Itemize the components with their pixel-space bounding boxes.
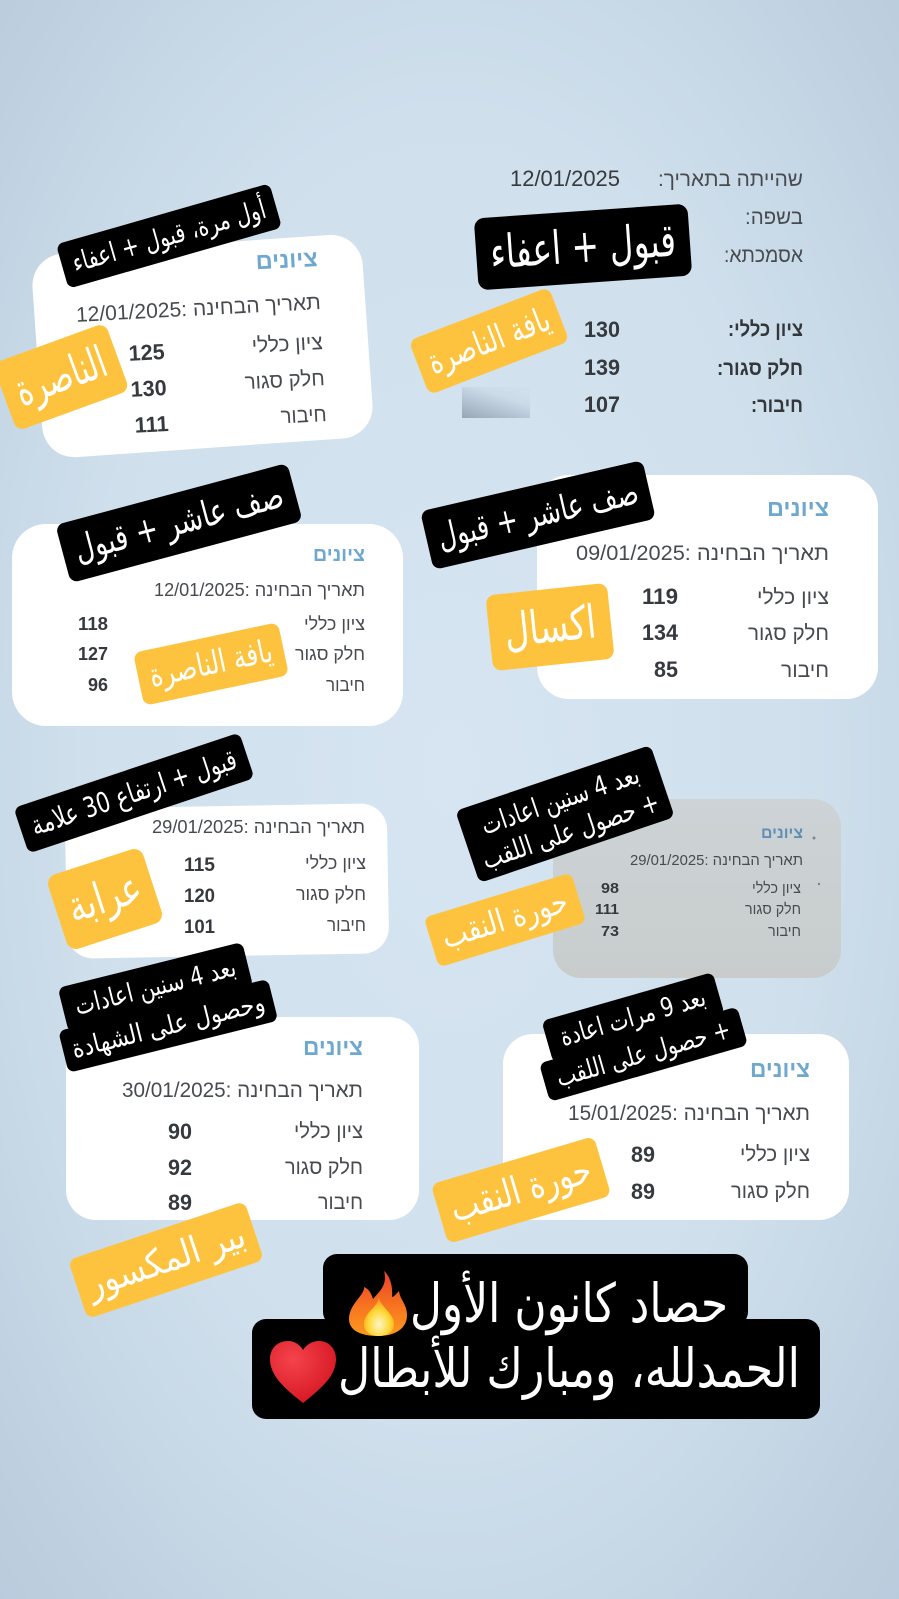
label: acceptance and 30 point rise: قبول + ارتفاع 30 علامة <box>27 743 241 842</box>
panel: card Iksal: 119 <box>642 584 678 609</box>
icon: fire <box>349 1271 407 1336</box>
label: four years of retakes and the degree: + حصول على اللقب <box>478 787 664 876</box>
label: four years of retakes and the certificate: بعد 4 سنين اعادات <box>72 953 239 1022</box>
panel: card Arraba <box>65 803 389 959</box>
panel: card Iksal: חיבור <box>781 659 829 682</box>
panel: card Arraba: ציון כללי <box>305 853 366 873</box>
label: four years of retakes and the certificate <box>48 938 278 1073</box>
panel: card Nazareth: חלק סגור <box>244 367 325 394</box>
panel: card Nazareth: תאריך הבחינה :12/01/2025 <box>75 291 321 327</box>
panel: card Nazareth <box>30 233 375 459</box>
label: tenth grade and acceptance (right) <box>420 460 656 570</box>
panel: card Yafa an-Nasira: 118 <box>78 614 108 634</box>
panel: gray card Negev course: 111 <box>595 901 619 918</box>
panel: top-right document scores: אסמכתא: <box>724 244 803 267</box>
panel: card Arraba: 101 <box>184 917 215 938</box>
tag: Bir al-Maksur: بير المكسور <box>79 1213 251 1307</box>
label: nine retakes and the degree: بعد 9 مرات اعادة <box>557 983 709 1053</box>
panel: gray card Negev course: חיבור <box>768 923 801 940</box>
panel: top-right document scores: שהייתה בתאריך: <box>658 168 803 191</box>
panel: top-right document scores: חיבור: <box>751 394 803 417</box>
panel: card Iksal: 85 <box>654 657 678 682</box>
title banner: الحمدلله، ومبارك للأبطال <box>338 1335 800 1400</box>
panel: card Nazareth: ציון כללי <box>251 331 323 358</box>
panel: top-right document scores: 107 <box>584 392 620 417</box>
panel: card Nazareth: 130 <box>130 375 167 402</box>
panel: card Bir al-Maksur: ציון כללי <box>294 1120 363 1143</box>
title banner: حصاد كانون الأول <box>410 1270 728 1335</box>
panel: card Iksal: ציונים <box>767 495 829 521</box>
panel: card Yafa an-Nasira: 127 <box>78 644 108 664</box>
panel: card Arraba: תאריך הבחינה :29/01/2025 <box>152 817 365 837</box>
panel: card Negev course (nine retakes): חלק סגור <box>731 1180 810 1203</box>
panel: card Bir al-Maksur: תאריך הבחינה :30/01/2025 <box>122 1079 363 1102</box>
panel: card Bir al-Maksur: 92 <box>168 1155 192 1180</box>
panel: card Bir al-Maksur: 90 <box>168 1119 192 1144</box>
tag: Nazareth <box>0 323 130 431</box>
panel: card Arraba: 115 <box>184 855 215 876</box>
label: four years of retakes and the degree: بعد 4 سنين اعادات <box>477 759 643 841</box>
panel: card Negev course (nine retakes): 89 <box>631 1142 655 1167</box>
panel: card Nazareth: 125 <box>128 339 165 366</box>
panel: card Negev course (nine retakes): ציון כללי <box>740 1143 810 1166</box>
panel: gray card Negev course: 73 <box>601 923 619 940</box>
tag: Yafa an-Nasira <box>409 287 569 395</box>
panel: card Negev course (nine retakes) <box>503 1034 849 1220</box>
panel: top-right document scores: בשפה: <box>745 206 803 229</box>
tag: Negev course: حورة النقب <box>437 882 572 956</box>
panel: gray card Negev course: חלק סגור <box>745 901 801 918</box>
label: acceptance and exemption <box>474 204 692 290</box>
panel: gray card Negev course: ציונים <box>761 825 803 842</box>
label: nine retakes and the degree <box>528 968 748 1102</box>
panel: card Yafa an-Nasira: חלק סגור <box>295 644 365 664</box>
panel: card Yafa an-Nasira: תאריך הבחינה :12/01/2025 <box>154 580 365 600</box>
label: four years of retakes and the certificate: وحصول على الشهادة <box>69 988 268 1065</box>
panel: card Bir al-Maksur <box>66 1017 419 1220</box>
tag: Yafa an-Nasira (second) <box>133 622 289 706</box>
title banner <box>252 1254 820 1419</box>
panel: card Yafa an-Nasira <box>12 524 403 726</box>
label: first time, acceptance and exemption: أول مرة، قبول + اعفاء <box>68 190 270 279</box>
panel: card Negev course (nine retakes): ציונים <box>750 1056 810 1082</box>
panel: card Iksal: ציון כללי <box>757 586 829 609</box>
panel: card Yafa an-Nasira: ציון כללי <box>304 614 365 634</box>
tag: Iksal <box>485 583 615 671</box>
panel: card Bir al-Maksur: 89 <box>168 1190 192 1215</box>
panel: top-right document scores: ציון כללי: <box>728 318 803 341</box>
panel: gray card Negev course: 98 <box>601 880 619 897</box>
panel: card Iksal: 134 <box>642 620 679 645</box>
panel: top-right document scores: 12/01/2025 <box>510 166 620 191</box>
panel: card Arraba: 120 <box>184 886 215 907</box>
panel: top-right document scores: 139 <box>584 355 620 380</box>
panel: card Iksal <box>537 475 878 699</box>
label: tenth grade and acceptance (left) <box>55 463 303 583</box>
panel: card Yafa an-Nasira: ציונים <box>313 544 365 566</box>
tag: Nazareth: الناصرة <box>8 336 114 417</box>
tag: Arraba: عرابة <box>61 862 148 933</box>
tag: Iksal: اكسال <box>501 594 598 658</box>
label: first time, acceptance and exemption <box>56 183 282 289</box>
panel: top-right document scores <box>462 166 803 418</box>
panel: gray card Negev course: תאריך הבחינה :29/01/2025 <box>630 852 803 869</box>
panel: card Negev course (nine retakes): תאריך הבחינה :15/01/2025 <box>568 1102 810 1125</box>
label: tenth grade and acceptance (right): صف عاشر + قبول <box>434 472 642 558</box>
panel: card Yafa an-Nasira: חיבור <box>326 675 365 695</box>
tag: Negev course (second): حورة النقب <box>445 1147 597 1232</box>
panel: top-right document scores: 130 <box>584 317 620 342</box>
label: four years of retakes and the degree <box>455 745 675 883</box>
panel: card Bir al-Maksur: ציונים <box>303 1034 363 1060</box>
panel: card Arraba: חיבור <box>327 915 366 935</box>
panel: card Nazareth: 111 <box>134 411 169 438</box>
panel: card Bir al-Maksur: חיבור <box>318 1191 363 1214</box>
panel: card Yafa an-Nasira: 96 <box>88 675 108 695</box>
panel: card Nazareth: ציונים <box>255 245 318 274</box>
label: tenth grade and acceptance (left): صف عاشر + قبول <box>70 475 288 570</box>
label: acceptance and exemption: قبول + اعفاء <box>488 213 678 280</box>
tag: Yafa an-Nasira (second): يافة الناصرة <box>146 631 276 695</box>
panel: gray card Negev course <box>553 799 841 978</box>
tag: Yafa an-Nasira: يافة الناصرة <box>422 299 556 383</box>
panel: card Arraba: חלק סגור <box>296 884 366 904</box>
tag: Arraba <box>45 846 165 952</box>
label: nine retakes and the degree: + حصول على اللقب <box>553 1015 734 1093</box>
panel: card Iksal: תאריך הבחינה :09/01/2025 <box>576 542 829 565</box>
panel: card Bir al-Maksur: חלק סגור <box>285 1156 363 1179</box>
panel: top-right document scores: חלק סגור: <box>717 357 803 380</box>
panel: card Iksal: חלק סגור <box>748 622 829 645</box>
panel: gray card Negev course: ציון כללי <box>752 880 801 897</box>
panel: card Nazareth: חיבור <box>280 403 327 428</box>
icon: heart <box>270 1341 336 1403</box>
panel: card Negev course (nine retakes): 89 <box>631 1179 655 1204</box>
